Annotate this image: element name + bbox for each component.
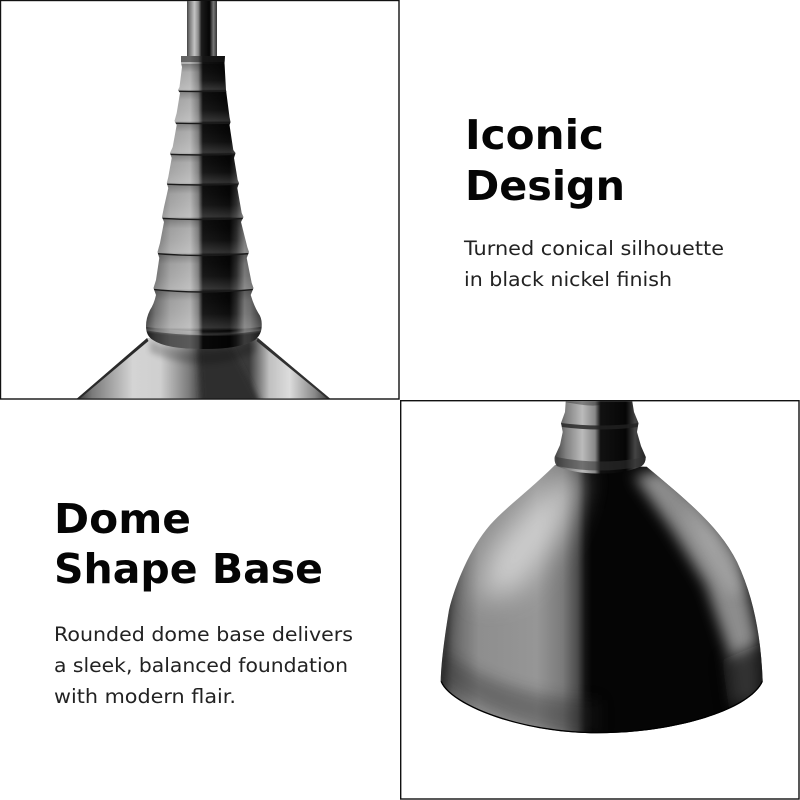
body text: conical silhouette description: in black nickel finish	[464, 268, 672, 291]
body text: conical silhouette description	[463, 237, 724, 291]
heading: Iconic Design	[465, 111, 625, 210]
body text: dome base description: with modern flair.	[54, 685, 236, 708]
body text: conical silhouette description: Turned conical silhouette	[463, 237, 724, 260]
heading: Iconic Design: Design	[465, 162, 625, 210]
heading: Iconic Design: Iconic	[465, 111, 604, 159]
panel border bottom right	[401, 401, 799, 799]
panel: dome shape base text	[54, 495, 353, 708]
dome shade	[425, 460, 770, 735]
body text: dome base description	[54, 623, 353, 708]
dome neck with turned rings	[555, 402, 646, 474]
lamp rod	[187, 1, 217, 57]
panel: iconic design text	[463, 111, 724, 291]
body text: dome base description: Rounded dome base delivers	[54, 623, 353, 646]
panel border top left	[0, 0, 399, 399]
panel: dome base photo	[401, 401, 799, 799]
panel: conical silhouette photo	[0, 0, 399, 410]
body text: dome base description: a sleek, balanced foundation	[54, 654, 348, 677]
heading: Dome Shape Base: Shape Base	[54, 545, 323, 593]
turned ribbed finial	[146, 56, 262, 349]
lamp cone shoulder	[77, 338, 330, 398]
heading: Dome Shape Base: Dome	[54, 495, 191, 543]
heading: Dome Shape Base	[54, 495, 323, 593]
